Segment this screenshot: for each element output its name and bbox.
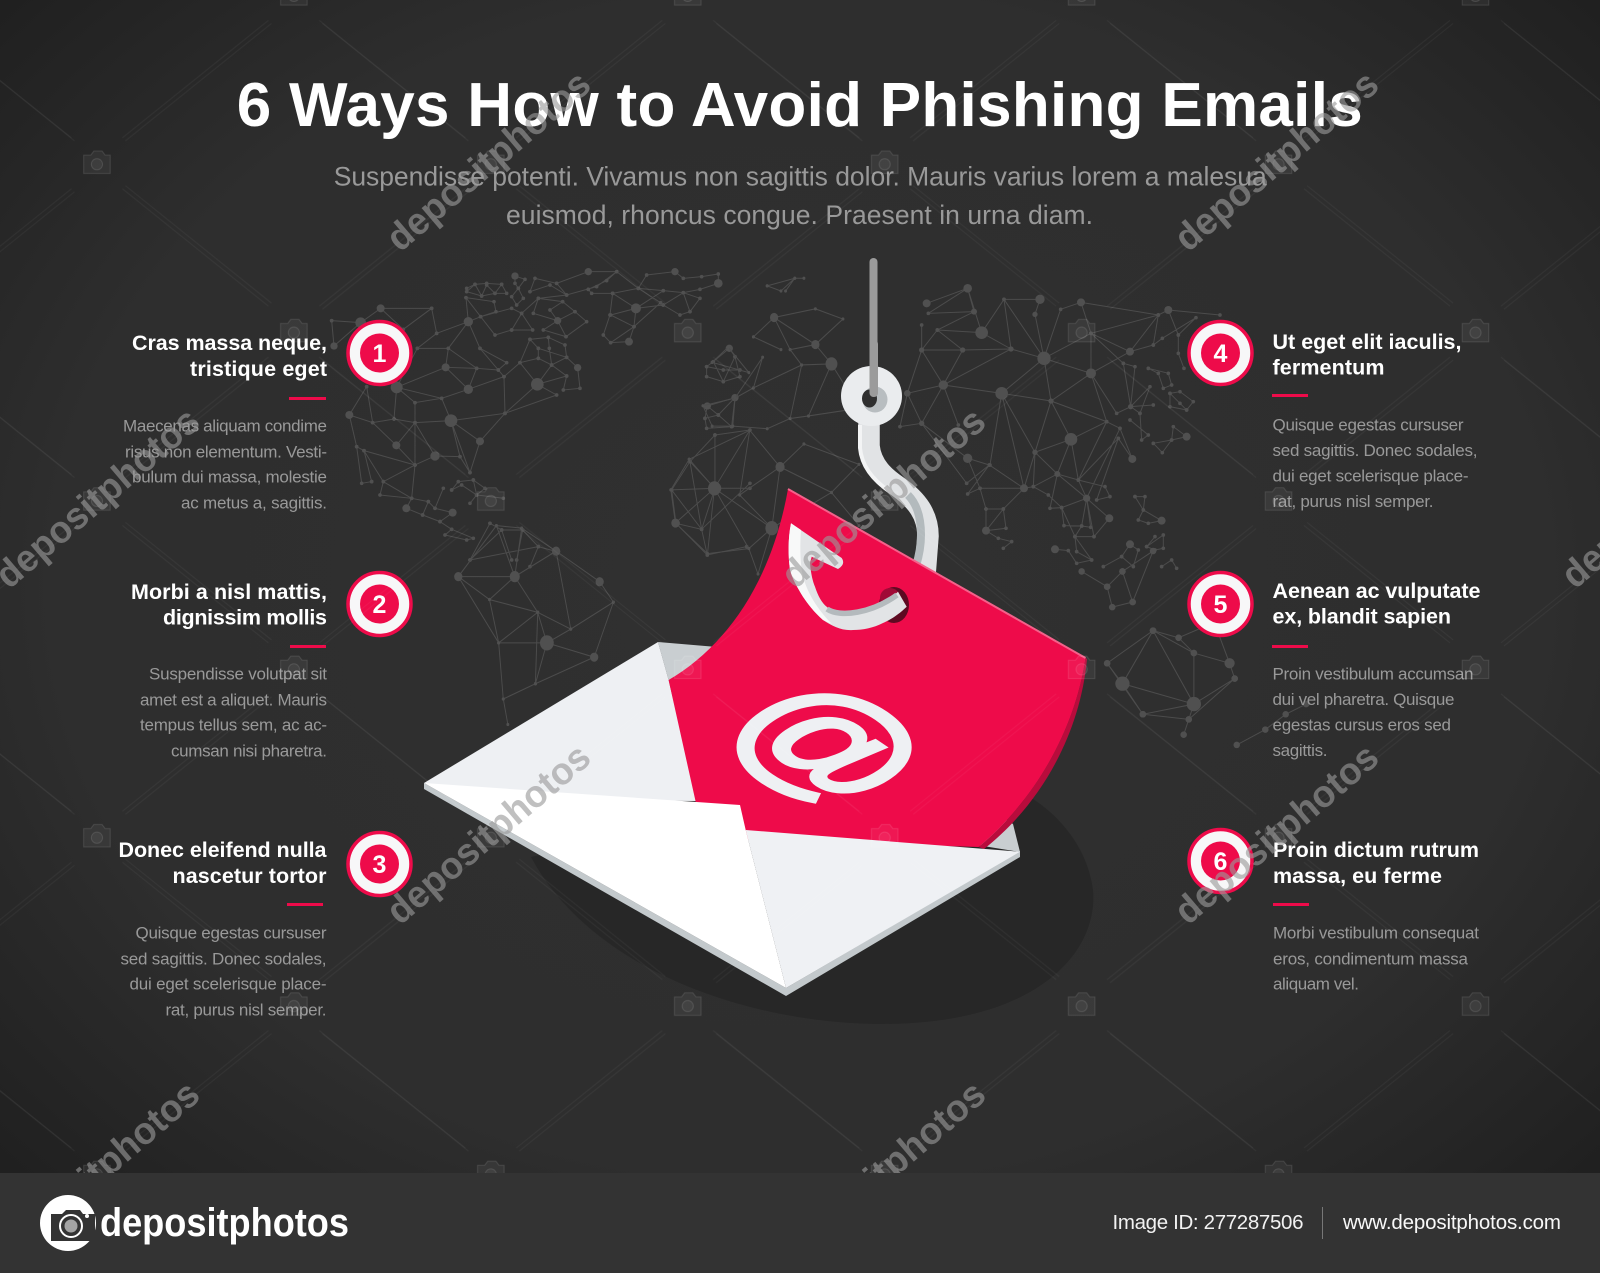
watermark text: depositphotos	[774, 1073, 994, 1270]
body 1	[123, 417, 327, 512]
heading 3: Donec eleifend nulla	[118, 838, 328, 862]
badge 4	[1189, 322, 1252, 384]
badge 2	[348, 572, 411, 636]
body 5: egestas cursus eros sed	[1272, 716, 1451, 735]
body 2	[140, 665, 327, 760]
heading 2: dignissim mollis	[163, 606, 327, 630]
item 5	[1189, 572, 1481, 760]
envelope thickness	[424, 783, 1020, 996]
envelope back	[658, 642, 1020, 852]
footer bar	[0, 1173, 1600, 1273]
footer image id: Image ID: 277287506	[1112, 1211, 1304, 1234]
body 2: cumsan nisi pharetra.	[171, 741, 327, 760]
item 6	[1189, 830, 1479, 994]
heading 1	[132, 331, 327, 381]
heading 5: ex, blandit sapien	[1272, 604, 1451, 628]
map: north america	[330, 268, 750, 567]
watermark text: depositphotos	[1167, 736, 1387, 933]
fishing line	[870, 258, 878, 396]
heading 1: Cras massa neque,	[132, 331, 327, 355]
footer divider	[1322, 1207, 1323, 1239]
envelope right flap	[746, 830, 1020, 988]
item 1	[123, 322, 411, 512]
body 1: Maecenas aliquam condime	[123, 417, 327, 436]
hook shank behind paper	[860, 420, 928, 575]
badge 6: 6	[1214, 848, 1227, 876]
body 4: dui eget scelerisque place-	[1272, 467, 1468, 486]
subtitle: Suspendisse potenti. Vivamus non sagittis dolor. Mauris varius lorem a malesua	[334, 162, 1267, 192]
body 2: amet est a aliquet. Mauris	[140, 690, 327, 709]
badge 1: 1	[373, 340, 387, 368]
hook eye	[841, 340, 902, 426]
map: africa and europe	[671, 278, 859, 574]
heading 3: nascetur tortor	[172, 864, 327, 888]
heading 5: Aenean ac vulputate	[1272, 579, 1481, 603]
accent bar 2	[290, 645, 326, 648]
footer logo wordmark: depositphotos	[100, 1201, 349, 1245]
illustration: phishing envelope on hook	[424, 258, 1093, 1024]
badge 1	[348, 322, 411, 384]
body 4: rat, purus nisl semper.	[1272, 492, 1434, 511]
body 1: bulum dui massa, molestie	[132, 468, 327, 487]
body 6: eros, condimentum massa	[1273, 949, 1469, 968]
heading 4	[1272, 330, 1462, 380]
at sign: @	[696, 649, 967, 833]
body 6	[1273, 924, 1479, 994]
hook tip in front of paper	[789, 523, 907, 630]
item 4	[1189, 322, 1478, 511]
map: south-east asia and australia	[1082, 551, 1306, 745]
accent bar 5	[1272, 645, 1308, 648]
heading 5	[1272, 579, 1481, 628]
body 5: sagittis.	[1272, 741, 1328, 760]
envelope left inner flap	[424, 642, 698, 801]
body 2: tempus tellus sem, ac ac-	[140, 716, 327, 735]
body 3: sed sagittis. Donec sodales,	[120, 949, 326, 968]
hook eyelet hole	[879, 587, 909, 623]
badge 6	[1189, 830, 1252, 892]
footer url: www.depositphotos.com	[1342, 1211, 1561, 1234]
map: asia	[900, 284, 1220, 568]
map: south america	[454, 526, 613, 724]
body 4: Quisque egestas cursuser	[1272, 416, 1464, 435]
body 4: sed sagittis. Donec sodales,	[1272, 441, 1478, 460]
watermark text: depositphotos	[379, 736, 599, 933]
body 3: dui eget scelerisque place-	[130, 975, 326, 994]
accent bar 4	[1272, 394, 1308, 397]
badge 3: 3	[373, 851, 386, 879]
heading 4: fermentum	[1272, 356, 1384, 380]
badge 5: 5	[1214, 591, 1228, 619]
body 5: dui vel pharetra. Quisque	[1272, 690, 1454, 709]
item 2	[131, 572, 411, 760]
badge 5	[1189, 572, 1252, 636]
heading 6: Proin dictum rutrum	[1273, 838, 1479, 862]
body 5: Proin vestibulum accumsan	[1272, 665, 1474, 684]
title: 6 Ways How to Avoid Phishing Emails	[237, 71, 1363, 140]
watermark text: depositphotos	[774, 400, 994, 597]
envelope front flap	[424, 783, 786, 988]
world map network	[330, 268, 1306, 745]
badge 2: 2	[373, 591, 386, 619]
body 5	[1272, 665, 1474, 760]
accent bar 1	[289, 397, 326, 400]
phishing letter	[669, 489, 1087, 849]
heading 6	[1273, 838, 1479, 888]
accent bar 3	[287, 903, 323, 906]
heading 4: Ut eget elit iaculis,	[1272, 330, 1462, 354]
subtitle: euismod, rhoncus congue. Praesent in urna diam.	[506, 200, 1093, 230]
badge 3	[348, 832, 411, 896]
body 3: rat, purus nisl semper.	[166, 1000, 326, 1019]
heading 1: tristique eget	[190, 357, 327, 381]
accent bar 6	[1273, 903, 1309, 906]
envelope shadow	[531, 799, 1093, 1024]
body 1: ac metus a, sagittis.	[181, 493, 327, 512]
body 1: risus non elementum. Vesti-	[125, 442, 327, 461]
badge 4: 4	[1214, 340, 1228, 368]
body 4	[1272, 416, 1478, 511]
watermark text: depositphotos	[379, 63, 599, 260]
watermark text: depositphotos	[1167, 63, 1387, 260]
body 6: aliquam vel.	[1273, 975, 1359, 994]
body 3: Quisque egestas cursuser	[136, 924, 327, 943]
heading 2: Morbi a nisl mattis,	[131, 580, 327, 604]
footer logo icon	[40, 1195, 96, 1251]
heading 2	[131, 580, 327, 630]
body 2: Suspendisse volutpat sit	[149, 665, 327, 684]
item 3	[118, 832, 411, 1019]
body 6: Morbi vestibulum consequat	[1273, 924, 1479, 943]
body 3	[120, 924, 327, 1019]
heading 6: massa, eu ferme	[1273, 864, 1442, 888]
subtitle	[334, 162, 1267, 230]
heading 3	[118, 838, 328, 888]
